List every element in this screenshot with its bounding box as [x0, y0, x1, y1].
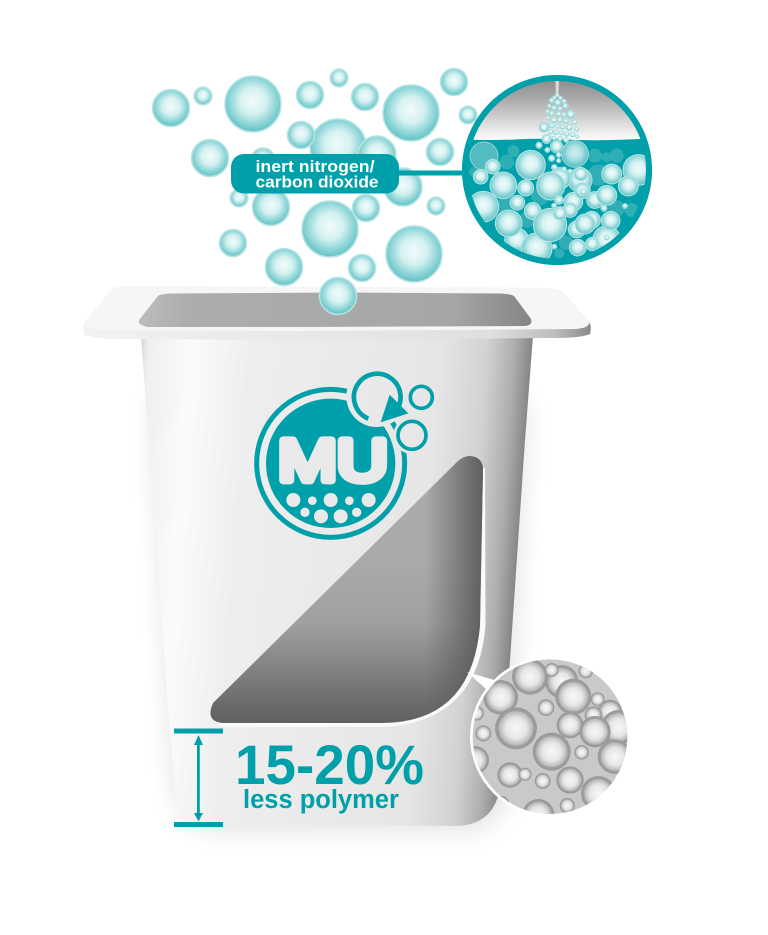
liquid surface: [473, 138, 641, 141]
connector line: [395, 170, 467, 176]
logo letters: MU: [278, 429, 388, 494]
yoghurt cup: [84, 286, 591, 826]
gas injection detail circle: [460, 75, 660, 270]
falling bubble over cup opening: [320, 278, 356, 314]
cup shadow: [150, 400, 528, 832]
cup opening: [139, 292, 531, 327]
polymer cells: [473, 660, 628, 814]
height dimension marker: [174, 728, 223, 827]
headspace gradient: [473, 81, 640, 140]
logo dots: [286, 493, 376, 523]
gas label: carbon dioxide: [256, 174, 378, 192]
logo ring and disc: [257, 389, 405, 537]
cup body: [141, 336, 533, 826]
less polymer caption: less polymer: [243, 786, 399, 814]
cup rim: [84, 286, 591, 340]
logo recycling circle: [354, 374, 401, 419]
window side shading: [210, 456, 483, 723]
gas feed pipe: [554, 80, 560, 94]
logo small bubble: [410, 386, 432, 408]
logo arrow head: [381, 395, 408, 422]
polymer foam detail circle: [470, 659, 628, 814]
gas stream bubbles: [536, 93, 579, 174]
gas label: inert nitrogen/: [256, 158, 375, 176]
circle teal base: [462, 75, 652, 265]
detail circle base: [470, 657, 630, 817]
gas label: [231, 154, 399, 194]
window lower lip highlight: [212, 468, 486, 727]
circle ring: [465, 78, 649, 262]
cup wall cutaway window: [210, 456, 483, 723]
gas bubbles cloud: [152, 68, 477, 286]
logo medium bubble: [398, 421, 426, 449]
mu cell logo: [257, 374, 432, 537]
callout wedge to polymer detail: [467, 672, 494, 689]
percentage heading: 15-20%: [235, 733, 424, 796]
liquid foam bubbles: [468, 141, 654, 264]
rim top surface: [84, 286, 589, 331]
faint background bubbles: [469, 145, 639, 258]
